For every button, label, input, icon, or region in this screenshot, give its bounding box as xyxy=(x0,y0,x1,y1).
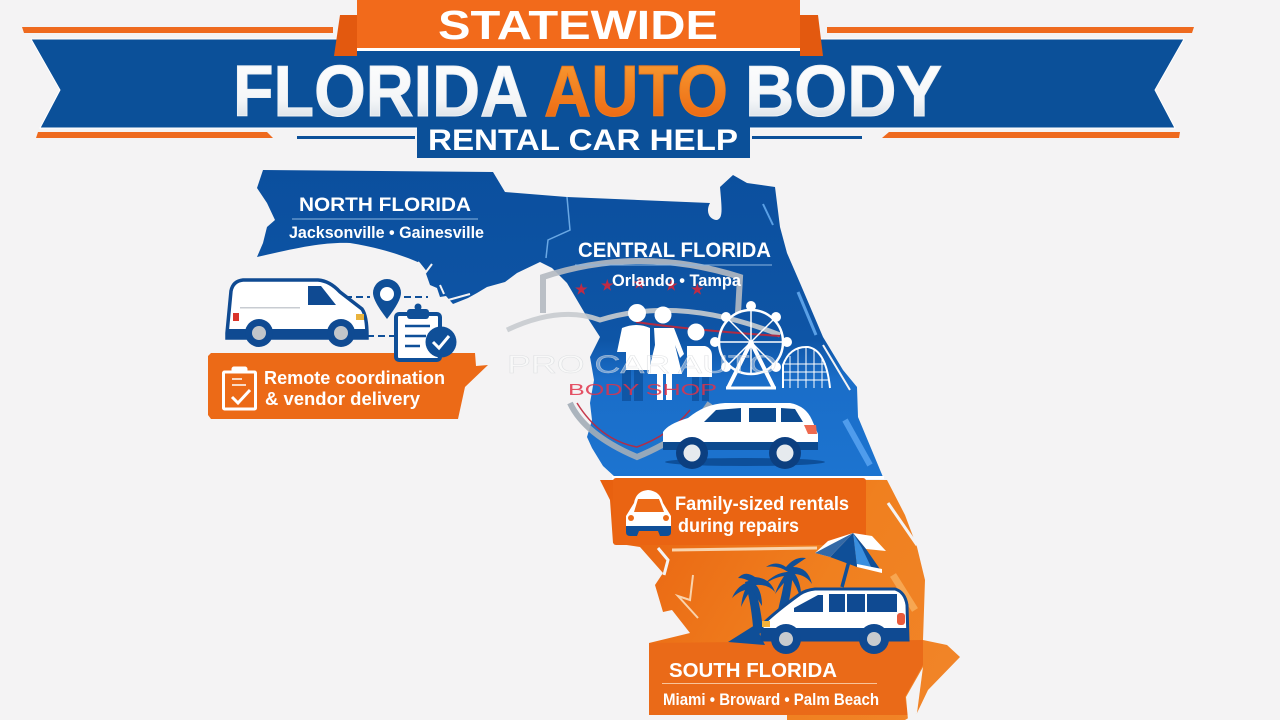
panhandle inlets xyxy=(418,262,470,302)
logo stars: ★ xyxy=(633,275,646,291)
white region divider xyxy=(612,476,884,479)
label: north florida xyxy=(289,195,484,242)
car: white minivan xyxy=(728,589,908,654)
main heading: BODY xyxy=(745,52,942,132)
statewide tab: STATEWIDE xyxy=(438,2,718,48)
icon: ferris wheel xyxy=(710,301,792,388)
icon: beach umbrella xyxy=(815,533,886,587)
top stripes xyxy=(22,27,1194,33)
rental car help tab: RENTAL CAR HELP xyxy=(428,124,738,157)
label: north florida: Jacksonville • Gainesville xyxy=(289,223,484,242)
callout text: Remote coordination xyxy=(264,368,445,388)
label: central florida: CENTRAL FLORIDA xyxy=(578,239,771,262)
south river notch xyxy=(906,667,923,720)
blue ribbon xyxy=(31,39,1184,128)
subtitle strip lines xyxy=(297,136,862,139)
icon: roller coaster xyxy=(783,347,830,388)
icon: location pin xyxy=(373,279,401,319)
Florida map xyxy=(257,170,960,720)
bottom stripes xyxy=(36,132,1180,138)
main heading: AUTO xyxy=(544,52,728,132)
car: white suv xyxy=(663,403,825,469)
north and central regions xyxy=(257,170,883,477)
icon: palm trees xyxy=(732,558,812,640)
callout text xyxy=(675,494,849,537)
title banner xyxy=(22,0,1194,158)
logo stars: ★ xyxy=(575,281,588,297)
label: central florida: Orlando • Tampa xyxy=(612,271,742,290)
callout: family rentals xyxy=(613,478,866,545)
callout text: Family-sized rentals xyxy=(675,494,849,515)
logo body shop text: BODY SHOP xyxy=(568,382,717,399)
main heading xyxy=(233,52,942,132)
south box xyxy=(649,640,923,715)
logo stars: ★ xyxy=(601,277,614,293)
main heading: FLORIDA xyxy=(233,52,528,132)
logo stars: ★ xyxy=(665,277,678,293)
callout: remote coordination xyxy=(208,353,488,419)
label: south florida xyxy=(662,660,879,709)
icon: delivery van xyxy=(227,280,367,347)
icon: taxi front xyxy=(626,490,671,536)
coastal highlights xyxy=(763,204,870,465)
icon: callout clipboard xyxy=(224,367,256,409)
callout text: during repairs xyxy=(678,516,799,537)
logo shield xyxy=(543,261,740,457)
county border lines xyxy=(546,197,570,258)
logo name: PRO CAR AUTO xyxy=(507,351,777,379)
south region xyxy=(600,480,960,720)
delivery route xyxy=(227,279,428,347)
icon: clipboard with check xyxy=(396,304,456,360)
statewide tab xyxy=(357,0,800,51)
ribbon side folds xyxy=(334,15,823,56)
callout text: & vendor delivery xyxy=(265,389,420,409)
label: south florida: Miami • Broward • Palm Beach xyxy=(663,690,879,709)
logo swoosh xyxy=(507,310,780,447)
watermark logo xyxy=(507,261,780,457)
label: south florida: SOUTH FLORIDA xyxy=(669,660,837,682)
callout text xyxy=(264,368,445,409)
logo stars: ★ xyxy=(691,281,704,297)
label: north florida: NORTH FLORIDA xyxy=(299,195,471,216)
icon: family xyxy=(617,304,712,401)
dashed route xyxy=(345,297,428,336)
south coast highlights xyxy=(658,503,917,618)
logo stars xyxy=(575,275,704,297)
label: central florida xyxy=(575,239,772,290)
